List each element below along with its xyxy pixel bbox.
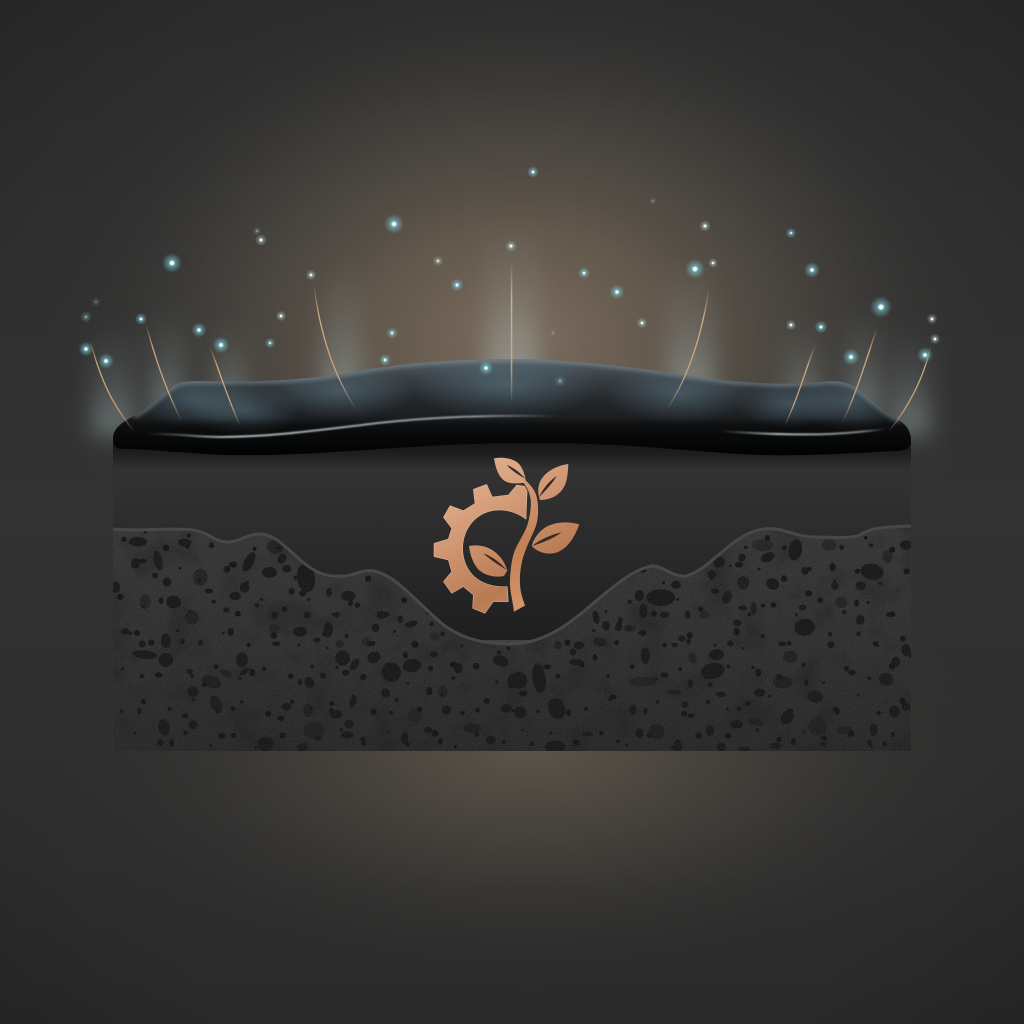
blue sheen patches on the layer bbox=[150, 363, 884, 430]
leaf: upper right bbox=[538, 464, 568, 500]
soil layer with pebbles bbox=[113, 524, 911, 751]
light rays rising from the surface bbox=[92, 225, 930, 435]
gear bbox=[434, 484, 527, 613]
subsoil dark band bbox=[113, 440, 911, 640]
pebbles: right half bbox=[509, 538, 912, 753]
top dark glossy layer bbox=[113, 352, 911, 458]
highlight line on the layer bbox=[145, 416, 560, 437]
soil top edge line bbox=[113, 526, 911, 644]
pebbles: left half bbox=[111, 537, 515, 752]
leaf: top bbox=[494, 458, 526, 483]
plant stem bbox=[510, 480, 538, 612]
glowing particles bbox=[78, 166, 940, 387]
leaf: lower, inside the gear bbox=[469, 545, 507, 577]
small speckles across the soil bbox=[117, 530, 1024, 917]
icon: copper gear and plant emblem bbox=[434, 458, 579, 613]
thin root filaments bbox=[90, 262, 931, 431]
leaf: middle right bbox=[532, 522, 579, 554]
pale rim along the top edge bbox=[134, 359, 900, 421]
